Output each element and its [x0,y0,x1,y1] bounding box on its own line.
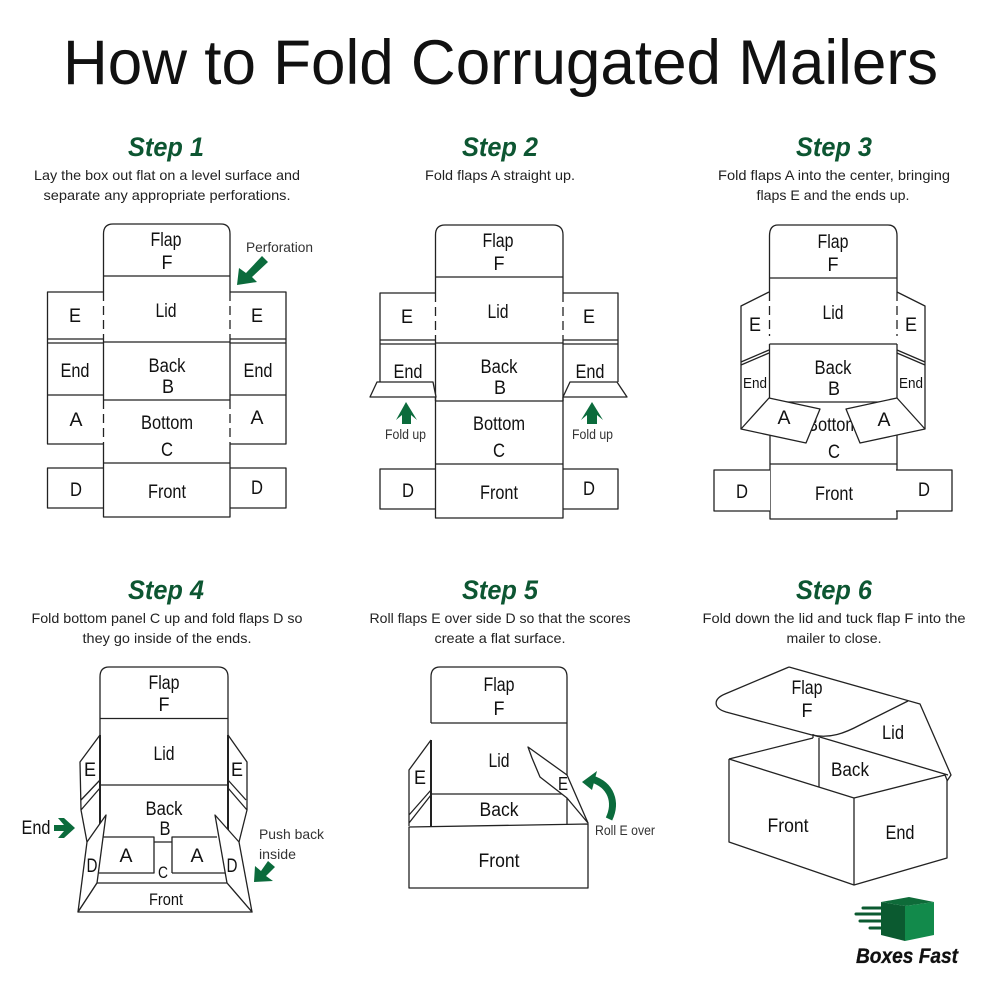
step 3 diagram: F [828,255,838,276]
push back label: inside [259,846,296,862]
step 5 diagram: Front [478,851,520,872]
step 3 diagram: End [899,376,923,392]
step 2 diagram: E [401,307,413,328]
step 2 diagram: Bottom [473,414,525,435]
step 4 diagram: C [158,863,168,882]
step 2 heading: Step 2 [462,132,538,162]
step 3 diagram: Bottom [807,415,859,436]
step 6 text: Fold down the lid and tuck flap F into the [702,610,966,626]
step 1 diagram: End [60,361,90,382]
step 4 diagram: A [120,846,133,867]
step 1 diagram: Lid [156,301,176,322]
step 1 diagram [48,224,286,517]
fold up label right: Fold up [572,426,613,442]
step 6 diagram [716,667,951,885]
step 3 diagram [714,225,952,519]
step 3 diagram: C [828,442,840,463]
step 2 diagram: B [494,378,506,399]
step 4 diagram: D [226,856,238,877]
logo: Boxes Fast [856,897,959,968]
step 1 diagram: E [251,306,263,327]
step 3 diagram: E [749,315,761,336]
perforation label: Perforation [246,239,313,255]
step 4 diagram: E [84,760,96,781]
icon: push back arrow [254,861,275,882]
step 3 diagram: D [736,482,748,503]
step 1 diagram: B [162,377,174,398]
step 6 diagram: F [802,701,812,722]
step 3 diagram: Lid [822,303,844,324]
step 2 diagram: Lid [488,302,508,323]
end label: End [22,818,50,839]
step 4 heading: Step 4 [128,575,204,605]
step 1 diagram: D [251,478,263,499]
push back label: Push back [259,826,325,842]
step 3 text: Fold flaps A into the center, bringing [718,167,950,183]
step 3 diagram: Front [815,484,854,505]
icon: perforation arrow [237,256,268,285]
step 2 diagram: F [494,254,504,275]
step 4 diagram: Front [149,890,183,909]
step 4 text: Fold bottom panel C up and fold flaps D so [32,610,303,626]
step 4 text: they go inside of the ends. [82,630,252,646]
step 2 text: Fold flaps A straight up. [425,167,575,183]
step 2 diagram: End [394,362,422,383]
step 1 diagram: A [70,410,83,431]
icon: fold up arrow right [581,402,603,424]
step 4 diagram [78,667,252,912]
step 5 text: create a flat surface. [434,630,566,646]
icon: fold up arrow left [396,402,417,424]
step 5 diagram: Lid [488,751,510,772]
step 1 diagram: Bottom [141,413,193,434]
icon: end arrow [54,818,75,838]
step 6 diagram: Back [831,760,869,781]
step 3 text: flaps E and the ends up. [756,187,910,203]
push back label [259,826,325,862]
step 2 diagram: D [583,479,595,500]
step 5 diagram: E [558,774,568,794]
step 1 diagram: A [250,408,264,429]
step 6 diagram: Flap [792,678,822,699]
step 2 diagram: Flap [482,231,514,252]
step 4 diagram: Flap [148,673,180,694]
step 2 diagram: C [493,441,505,462]
step 6 diagram: Front [768,816,809,837]
step 5 text: Roll flaps E over side D so that the scores [370,610,630,626]
step 1 diagram: End [244,361,272,382]
step 4 diagram: B [160,819,170,840]
roll label: Roll E over [595,822,655,838]
step 3 diagram: B [828,379,840,400]
step 5 text [370,610,630,646]
step 5 diagram: F [494,699,504,720]
step 1 text: separate any appropriate perforations. [44,187,290,203]
step 2 diagram: End [576,362,604,383]
step 3 diagram: E [905,315,917,336]
step 4 diagram: F [158,695,170,716]
step 1 diagram: Flap [150,230,182,251]
step 1 diagram: C [161,440,173,461]
step 6 diagram: Lid [882,723,904,744]
step 1 diagram: F [162,253,172,274]
step 1 text: Lay the box out flat on a level surface and [34,167,300,183]
step 3 heading: Step 3 [796,132,872,162]
step 5 diagram: Flap [484,675,514,696]
step 6 text [702,610,966,646]
fold up label left: Fold up [385,426,426,442]
step 5 diagram: Back [480,800,519,821]
step 3 diagram: A [878,410,891,431]
step 1 text [34,167,300,203]
step 3 diagram: D [918,480,930,501]
step 2 diagram: Front [480,483,519,504]
step 4 text [32,610,303,646]
title: How to Fold Corrugated Mailers [63,28,938,98]
step 1 heading: Step 1 [128,132,204,162]
step 3 text [718,167,950,203]
step 5 heading: Step 5 [462,575,539,605]
step 5 diagram [409,667,588,888]
step 2 diagram [370,225,627,518]
step 3 diagram: Flap [818,232,848,253]
step 2 diagram: D [402,481,414,502]
step 6 heading: Step 6 [796,575,873,605]
step 4 diagram: A [190,846,204,867]
step 4 diagram: D [86,856,98,877]
step 1 diagram: Back [148,356,186,377]
step 6 diagram: End [886,823,914,844]
step 5 diagram: E [414,768,426,789]
step 6 text: mailer to close. [786,630,882,646]
step 3 diagram: End [743,376,767,392]
icon: roll arrow [582,771,612,819]
step 1 diagram: D [70,480,82,501]
step 2 diagram: Back [480,357,518,378]
step 2 diagram: E [583,307,595,328]
step 1 diagram: Front [148,482,187,503]
step 4 diagram: E [231,760,243,781]
step 4 diagram: Back [146,799,183,820]
step 1 diagram: E [69,306,81,327]
step 3 diagram: Back [814,358,852,379]
step 3 diagram: A [778,408,791,429]
step 4 diagram: Lid [154,744,174,765]
logo: Boxes Fast: Boxes Fast [856,945,959,968]
